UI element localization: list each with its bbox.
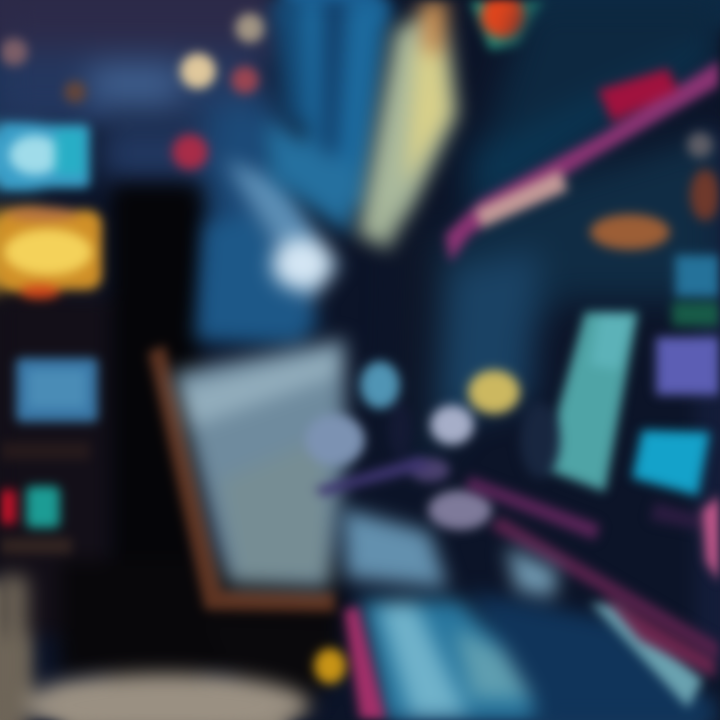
- foreground: beige seat: [0, 575, 310, 720]
- screen: yellow orange display: [0, 207, 102, 299]
- light: top rainbow sign: [470, 0, 545, 50]
- panel: right dark teal background: [395, 0, 720, 470]
- panel: bottom blue keypad: [342, 508, 720, 720]
- buttons: red and teal lights: [0, 442, 90, 554]
- stripes: blue vertical light beams: [265, 0, 390, 235]
- panel: central blue wedge: [195, 160, 340, 345]
- screen: blue display: [16, 358, 98, 422]
- stripes: purple magenta diagonals: [315, 456, 720, 660]
- lights: ceiling lamps: [0, 13, 265, 170]
- accent: pink edge right: [650, 495, 720, 582]
- screen: teal arcade display: [542, 312, 638, 492]
- screen: cyan display: [0, 124, 90, 188]
- accent: pink left edge of keypad: [344, 592, 715, 720]
- background: left dark column: [0, 185, 340, 720]
- cluster: central reflective keys: [305, 361, 560, 530]
- stripe: magenta diagonal sign: [445, 60, 720, 262]
- panel: grey blue cabinet with brown frame: [148, 338, 345, 612]
- panel: right upper details: [590, 132, 720, 297]
- screen: purple display: [656, 302, 720, 395]
- screen: cyan display right: [632, 430, 710, 496]
- background: upper left ceiling: [0, 0, 285, 320]
- light: amber spot: [314, 648, 346, 684]
- panel: bottom right light key: [590, 602, 703, 708]
- stripe: pale rainbow beam: [358, 0, 458, 250]
